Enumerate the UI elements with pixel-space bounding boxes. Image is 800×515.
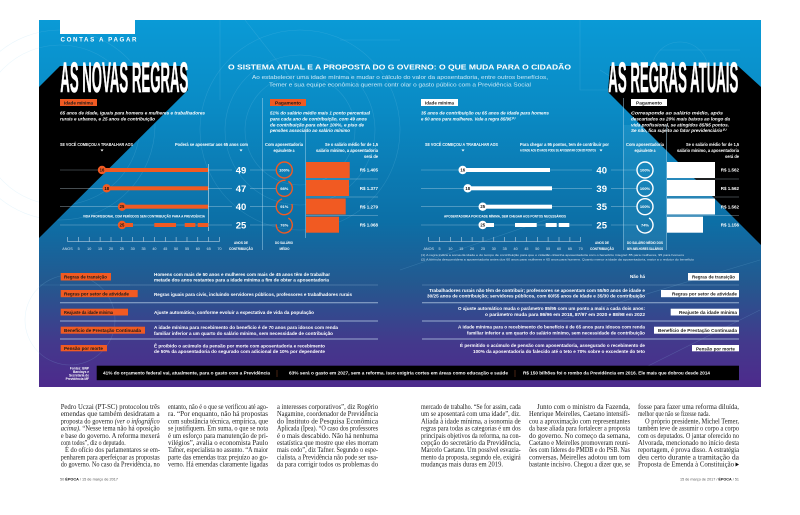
chart: right, career timeline: 18 [465, 186, 471, 191]
right pension bars: será de [725, 154, 739, 159]
sources: Barclays e [73, 370, 89, 374]
sources: Secretaria de [69, 374, 89, 378]
article column 2: vilégios”, avalia o economista Paulo [168, 438, 268, 447]
age axis: ANOS [423, 247, 434, 251]
left replacement rate rings: MÉDIO [280, 246, 290, 251]
panel: new rules, payment: 51% do salário médio mais 1 ponto percentual [270, 110, 371, 116]
right pension bars [667, 142, 739, 233]
article column 6: Alvorada, mencionado no início desta [638, 438, 740, 447]
row: death pension: É permitido o acúmulo de pensão com aposentadoria, assegurado o recebimento de [460, 341, 645, 349]
age axis: 30 [492, 247, 496, 251]
left replacement rate rings [265, 142, 303, 251]
left replacement rate rings: equivalente a [274, 148, 295, 153]
article column 3: Nagamine, coordenador de Previdência [277, 409, 379, 418]
article column 2: com substância técnica, empírica, que [168, 416, 269, 425]
row: transition: Regras de transição [64, 275, 107, 281]
age axis [62, 237, 222, 251]
row: continuous benefit: Benefício de Prestação Continuada [658, 328, 737, 334]
black key facts bar: 41% do orçamento federal vai, atualmente, para o gasto com a Previdência [103, 371, 270, 377]
article column 3: a interesses corporativos”, diz Rogério [277, 402, 378, 411]
row: age adjustment [458, 306, 739, 318]
age axis: 60 [196, 247, 200, 251]
right replacement rate rings [626, 142, 664, 251]
article column 2: Tafner, especialista no assunto. “A maior [168, 445, 268, 454]
age axis: 25 [481, 247, 485, 251]
panel: new rules, payment: Pagamento [275, 100, 301, 106]
article column 2 [168, 402, 269, 469]
chart: right, career timeline: 25 [480, 222, 486, 228]
intro text: Ao estabelecer uma idade mínima e mudar o cálculo do valor da aposentadoria, entre outros benefícios, [252, 75, 548, 81]
left pension bars: será de [364, 154, 378, 159]
sources: Previdência MF [66, 377, 89, 381]
article column 6: O próprio presidente, Michel Temer, [645, 416, 739, 425]
left replacement rate rings: 98% [280, 186, 289, 191]
age axis: 40 [152, 247, 156, 251]
chart: left, career timeline: 25 [120, 222, 125, 228]
age axis [423, 237, 583, 251]
article column 3: é o mais descabido. Não há nenhuma [277, 431, 379, 440]
age axis: 20 [109, 247, 113, 251]
age axis: 10 [448, 247, 452, 251]
right replacement rate rings: Com aposentadoria [626, 142, 664, 147]
footnotes [421, 253, 694, 262]
left replacement rate rings: 91% [280, 204, 289, 209]
panel: new rules, payment: pensões associado ao salário mínimo [269, 128, 350, 133]
age axis: 70 [217, 247, 222, 251]
row: death pension: Pensão por morte [696, 346, 735, 352]
article column 5: Henrique Meirelles, Caetano intensifi- [529, 409, 630, 418]
left years of contribution: 47 [236, 184, 246, 195]
age axis: 40 [514, 247, 518, 251]
chart headers: SE VOCÊ COMEÇOU A TRABALHAR AOS [425, 140, 498, 147]
age axis: 15 [459, 247, 463, 251]
row: continuous benefit: familiar inferior a um quarto do salário mínimo, sem necessidade de contribuição [467, 330, 645, 336]
article column 1: do governo. No caso da Previdência, no [61, 460, 160, 469]
gap note: VIDA PROFISSIONAL COM PERÍODOS SEM CONTRIBUIÇÃO PARA A PREVIDÊNCIA [83, 214, 205, 218]
row: transition: Homens com mais de 50 anos e mulheres com mais de 45 anos têm de trabalhar [154, 272, 330, 278]
article column 6: com os deputados. O jantar oferecido no [638, 431, 739, 440]
right pension bars: Se o salário médio for de 1,5 [686, 142, 739, 147]
article column 1: penharem para aperfeiçoar as propostas [61, 452, 160, 461]
chart: left, career timeline: 18 [104, 186, 110, 191]
right pension bars: R$ 1.562 [721, 168, 739, 173]
article column 2: entanto, não é o que se verificou até ago- [168, 402, 268, 411]
right years of contribution [590, 166, 614, 251]
row: death pension [61, 342, 325, 355]
article column 6 [638, 402, 740, 469]
left replacement rate rings: Com aposentadoria [265, 142, 303, 147]
panel: new rules, payment: de contribuição para obter 100%, e piso de [270, 122, 365, 128]
panel: current rules, payment: descartados os 20% mais baixos ao longo da [631, 116, 731, 122]
article column 2: verno. Há emendas claramente ligadas [168, 460, 268, 469]
sources [66, 366, 90, 381]
row: sector [427, 288, 739, 300]
right years of contribution: 25 [596, 220, 608, 232]
age axis: 35 [503, 247, 507, 251]
left years of contribution: ANOS DE [234, 241, 248, 245]
row: sector [61, 290, 352, 298]
article column 4: um se aposentará com uma idade”, diz. [421, 409, 521, 418]
article column 1: e base do governo. A reforma mexerá [61, 431, 160, 440]
intro text: Temer e sua equipe econômica querem contr olar o gasto público com a Previdência Social [269, 82, 531, 88]
section label: CONTAS A PAGAR [60, 36, 137, 44]
age axis: 35 [141, 247, 146, 251]
article column 6: fosse para fazer uma reforma diluída, [638, 402, 739, 411]
article column 6: Proposta de Emenda à Constituição [638, 460, 734, 469]
article column 5: do governo. No começo da semana, [529, 431, 630, 440]
panel: current rules, payment: Se não, fica sujeito ao fator previdenciário⁽²⁾ [631, 128, 727, 133]
article column 1: acima). “Nesse tema não há oposição [61, 424, 160, 433]
article column 6: reportagem, é prova disso. A estratégia [638, 445, 740, 454]
article column 3: cialista, a Previdência não pode ser usa- [277, 452, 378, 461]
article column 4: mudanças mais duras em 2019. [421, 460, 503, 469]
article column 2: ra. “Por enquanto, não há propostas [168, 409, 268, 418]
panel: current rules, payment [631, 99, 731, 133]
age axis: 70 [579, 247, 583, 251]
main headline: O SISTEMA ATUAL E A PROPOSTA DO G OVERNO: O QUE MUDA PARA O CIDADÃO [228, 62, 571, 72]
row: transition: metade dos anos restantes para a idade mínima a fim de obter a aposentadoria [154, 278, 329, 284]
black key facts bar [97, 366, 739, 380]
left years of contribution: CONTRIBUIÇÃO [229, 246, 253, 251]
row: sector: 30/25 anos de contribuição; servidores públicos, com 60/55 anos de idade e 35/30 de contribuição [427, 294, 645, 300]
article column 4: regras para todas as categorias é um dos [421, 424, 521, 433]
chart headers: SE VOCÊ COMEÇOU A TRABALHAR AOS [60, 140, 133, 147]
age axis: 25 [120, 247, 124, 251]
black key facts bar: 63% será o gasto em 2027, sem a reforma. Isso exigiria cortes em áreas como educação e saúde [289, 371, 508, 377]
article column 1: com todos”, diz o deputado. [61, 438, 126, 447]
age axis: 50 [535, 247, 539, 251]
article column 6: também teve de assumir o corpo a corpo [638, 424, 739, 433]
left pension bars: R$ 1.377 [360, 186, 378, 191]
age axis: 45 [163, 247, 167, 251]
panel: current rules, minimum age: 35 anos de contribuição ou 65 anos de idade para homens [421, 110, 550, 116]
panel: current rules, minimum age: e 60 anos para mulheres. Vale a regra 85/95⁽¹⁾ [421, 116, 516, 122]
age axis: 65 [568, 247, 572, 251]
row: age adjustment: o parâmetro muda para 86/96 em 2018, 87/97 em 2020 e 88/98 em 2022 [485, 312, 645, 318]
black key facts bar: R$ 150 bilhões foi o rombo da Previdência em 2016. Ele mais que dobrou desde 2014 [523, 371, 710, 377]
black diagonal left [39, 66, 188, 238]
panel: current rules, minimum age [421, 99, 550, 122]
left pension bars: R$ 1.279 [360, 204, 378, 209]
row: sector: Regras por setor de atividade [672, 292, 737, 298]
chart headers [60, 140, 248, 152]
intro text [252, 75, 548, 88]
chart: right, career timeline [421, 140, 637, 251]
right replacement rate rings: equivalente a [634, 148, 656, 153]
right replacement rate rings: 74% [641, 222, 649, 228]
right years of contribution: ANOS DE [595, 241, 609, 245]
row: continuous benefit [61, 325, 338, 337]
age axis: ANOS [62, 247, 73, 251]
article column 3: mais cedo”, diz Tafner. Segundo o espe- [277, 445, 378, 454]
age axis: 10 [87, 247, 91, 251]
row: transition [630, 273, 739, 281]
chart headers: Poderá se aposentar aos 65 anos com [175, 142, 248, 147]
row: age adjustment: O ajuste automático muda o parâmetro 85/95 com um ponto a mais a cada dois anos: [458, 306, 645, 312]
chart headers: Para chegar a 95 pontos, tem de contribuir por [520, 142, 609, 147]
right pension bars: R$ 1.562 [721, 204, 739, 209]
row: death pension: Pensão por morte [64, 346, 103, 352]
right years of contribution: 35 [596, 202, 608, 213]
article column 4: principais objetivos da reforma, na con- [421, 431, 521, 440]
row: age adjustment: Ajuste automático, conforme evoluir a expectativa de vida da população [154, 310, 314, 316]
panel: current rules, minimum age: Idade mínima [425, 100, 454, 106]
article column 5: ões com líderes do PMDB e do PSB. Nas [529, 445, 630, 454]
age axis: 55 [185, 247, 189, 251]
chart headers: A IDADE AOS 65 ANOS PODE SE APOSENTAR COM 85 PONTOS [520, 148, 596, 152]
article column 1: É do ofício dos parlamentares se em- [65, 444, 160, 454]
left years of contribution [229, 166, 253, 251]
age axis: 55 [546, 247, 550, 251]
article column 2: parte das emendas traz prejuízo ao go- [168, 452, 268, 461]
left years of contribution: 40 [236, 202, 246, 213]
article column 6: deu certo durante a tramitação da [638, 452, 740, 461]
row: sector: Regras por setor de atividade [64, 292, 129, 298]
chart: left, career timeline: 16 [100, 168, 105, 172]
right pension bars: R$ 1.156 [721, 223, 739, 228]
article column 4: Marcelo Caetano. Um possível esvazia- [421, 445, 521, 454]
sources: Fontes: BNP [70, 366, 90, 370]
left pension bars: salário mínimo, a aposentadoria [316, 148, 378, 153]
right years of contribution: 40 [596, 166, 607, 176]
article column 4: cepção do secretário da Previdência, [421, 438, 521, 447]
panel: new rules, minimum age [60, 99, 206, 122]
text: AS NOVAS REGRAS [60, 54, 188, 102]
article column 2: é um esforço para manutenção de pri- [168, 431, 268, 440]
left replacement rate rings: DO SALÁRIO [275, 240, 293, 245]
row: continuous benefit: familiar inferior a um quarto do salário mínimo, sem necessidade de contribuição [154, 331, 333, 337]
article column 5: conversas, Meirelles adotou um tom [529, 452, 630, 461]
panel: new rules, payment: para cada ano de contribuição, com 49 anos [269, 116, 368, 122]
left pension bars: R$ 1.405 [360, 168, 378, 173]
right page footer: 15 de março de 2017 / ÉPOCA / 51 [680, 476, 739, 482]
white tab [60, 20, 135, 34]
row: death pension: É proibido o acúmulo da pensão por morte com aposentadoria e recebimento [154, 342, 325, 350]
right replacement rate rings: DO SALÁRIO MÉDIO DOS [627, 240, 663, 245]
article column 3: Aplicada (Ipea). “O caso dos professores [277, 424, 378, 433]
right years of contribution: CONTRIBUIÇÃO [590, 246, 614, 251]
article column 4: mercado de trabalho. “Se for assim, cada [421, 402, 521, 411]
age axis: 60 [557, 247, 561, 251]
article column 3: do Instituto de Pesquisa Econômica [277, 416, 379, 425]
chart: left, career timeline: 25 [120, 204, 125, 209]
right pension bars: salário mínimo, a aposentadoria [677, 148, 739, 153]
article column 3: estatística que mostre que eles morram [277, 438, 378, 447]
age axis: 30 [131, 247, 135, 251]
bars [458, 166, 569, 229]
chart: left, career timeline [60, 140, 276, 251]
row: transition: Regras de transição [692, 275, 735, 281]
panel: infographic background [39, 20, 761, 387]
rows: new rules [61, 272, 352, 355]
row: death pension: de 50% da aposentadoria do segurado com adicional de 10% por dependente [154, 349, 325, 355]
row: age adjustment [61, 309, 314, 316]
panel: new rules, minimum age: 65 anos de idade, iguais para homens e mulheres e trabalhadores [60, 110, 206, 116]
row: sector: Regras iguais para civis, incluindo servidores públicos, professores e trabalhadores rurais [154, 292, 352, 298]
article column 6: melhor que não se fizesse nada. [638, 409, 710, 418]
article column 5 [529, 402, 631, 469]
article column 3: da para corrigir todos os problemas do [277, 460, 378, 469]
highlight column [624, 125, 666, 250]
black diagonal right [608, 66, 761, 245]
article column 4: mento da proposta, segundo ele, exigirá [421, 452, 521, 461]
left replacement rate rings: 100% [279, 168, 290, 172]
gap note: APOSENTADORIA POR IDADE MÍNIMA, SEM CHEGAR AOS PONTOS NECESSÁRIOS [444, 214, 566, 218]
left pension bars [306, 142, 378, 233]
article column 5: cou a aproximação com representantes [529, 416, 630, 425]
bars [98, 166, 208, 229]
right years of contribution: 39 [596, 184, 607, 195]
rows: current rules [427, 273, 739, 355]
article column 5: Junto com o ministro da Fazenda, [537, 402, 630, 411]
article column 5: Caetano e Meirelles promoveram reuni- [529, 438, 630, 447]
article column 1: Pedro Uczai (PT-SC) protocolou três [61, 402, 160, 411]
panel: new rules, minimum age: rurais e urbanos, e 25 anos de contribuição [60, 116, 155, 122]
right pension bars: R$ 1.562 [721, 186, 739, 191]
article column 2: se justifiquem. Em suma, o que se nota [168, 424, 269, 433]
age axis: 5 [438, 247, 441, 251]
row: death pension [460, 341, 739, 355]
left pension bars: R$ 1.068 [360, 223, 378, 228]
article column 4: Aliada à idade mínima, a isonomia de [421, 416, 521, 425]
row: age adjustment: Reajuste da idade mínima [679, 310, 737, 316]
chart: right, career timeline: 25 [480, 204, 486, 209]
footnotes: (2) A fórmula desconsidera a aposentadoria antes dos 60 anos para mulheres e 65 anos para homens. Quanto menor a idade da aposentadoria, maior a o redutor do benefício [421, 258, 694, 262]
article column 5: da base aliada para fortalecer a proposta [529, 424, 631, 433]
age axis: 50 [174, 247, 178, 251]
row: continuous benefit: Benefício de Prestação Continuada [64, 328, 141, 334]
chart: right, career timeline: 16 [460, 168, 466, 172]
panel: current rules, payment: vida profissional, se atingidos 85/95 pontos. [631, 122, 729, 128]
article column 1 [61, 402, 160, 469]
age axis: 65 [207, 247, 211, 251]
panel: current rules, payment: Pagamento [636, 100, 662, 106]
right replacement rate rings: 80% MELHORES SALÁRIOS [627, 246, 663, 251]
row: continuous benefit: A idade mínima para o recebimento do benefício é de 65 anos para idosos com renda [458, 324, 645, 330]
row: continuous benefit [458, 324, 739, 336]
row: age adjustment: Reajuste da idade mínima [64, 310, 113, 316]
article column 4 [421, 402, 521, 469]
footnotes: (1) A regra indica a soma da idade e do tempo de contribuição para que o cidadão obtenha aposentadoria com o benefício integral: 85 para mulheres, 95 para homens [421, 253, 685, 257]
article column 3 [277, 402, 379, 469]
age axis: 15 [98, 247, 102, 251]
article column 1: emendas que também desidratam a [61, 409, 160, 418]
row: transition: Não há [630, 274, 645, 280]
article column 5: bastante incisivo. Chegou a dizer que, se [529, 460, 631, 469]
panel: new rules, minimum age: Idade mínima [64, 100, 93, 106]
row: sector: Trabalhadores rurais não têm de contribuir; professores se aposentam com 55/50 anos de idade e [429, 288, 645, 294]
vertical rules [262, 98, 666, 250]
article column 1: proposta do governo (ver o infográfico [61, 416, 160, 425]
left replacement rate rings: 76% [280, 222, 289, 228]
left page footer: 50 ÉPOCA / 15 de março de 2017 [60, 476, 118, 482]
panel: new rules, payment [269, 99, 371, 133]
right replacement rate rings: 100% [640, 204, 651, 209]
left years of contribution: 25 [236, 220, 247, 232]
chart headers [425, 140, 609, 152]
right replacement rate rings: 100% [640, 168, 651, 172]
age axis: 5 [78, 247, 80, 251]
age axis: 45 [524, 247, 528, 251]
panel: current rules, payment: Corresponde ao salário médio, após [631, 110, 724, 116]
row: transition [61, 272, 330, 284]
right replacement rate rings: 100% [640, 186, 651, 191]
row dividers [60, 285, 739, 339]
age axis: 20 [470, 247, 474, 251]
left pension bars: Se o salário médio for de 1,5 [325, 142, 378, 147]
row: death pension: 100% da aposentadoria do falecido até o teto e 70% sobre o excedente do teto [473, 349, 645, 355]
row: continuous benefit: A idade mínima para recebimento do benefício é de 70 anos para idosos com renda [154, 325, 338, 331]
left years of contribution: 49 [236, 166, 246, 176]
